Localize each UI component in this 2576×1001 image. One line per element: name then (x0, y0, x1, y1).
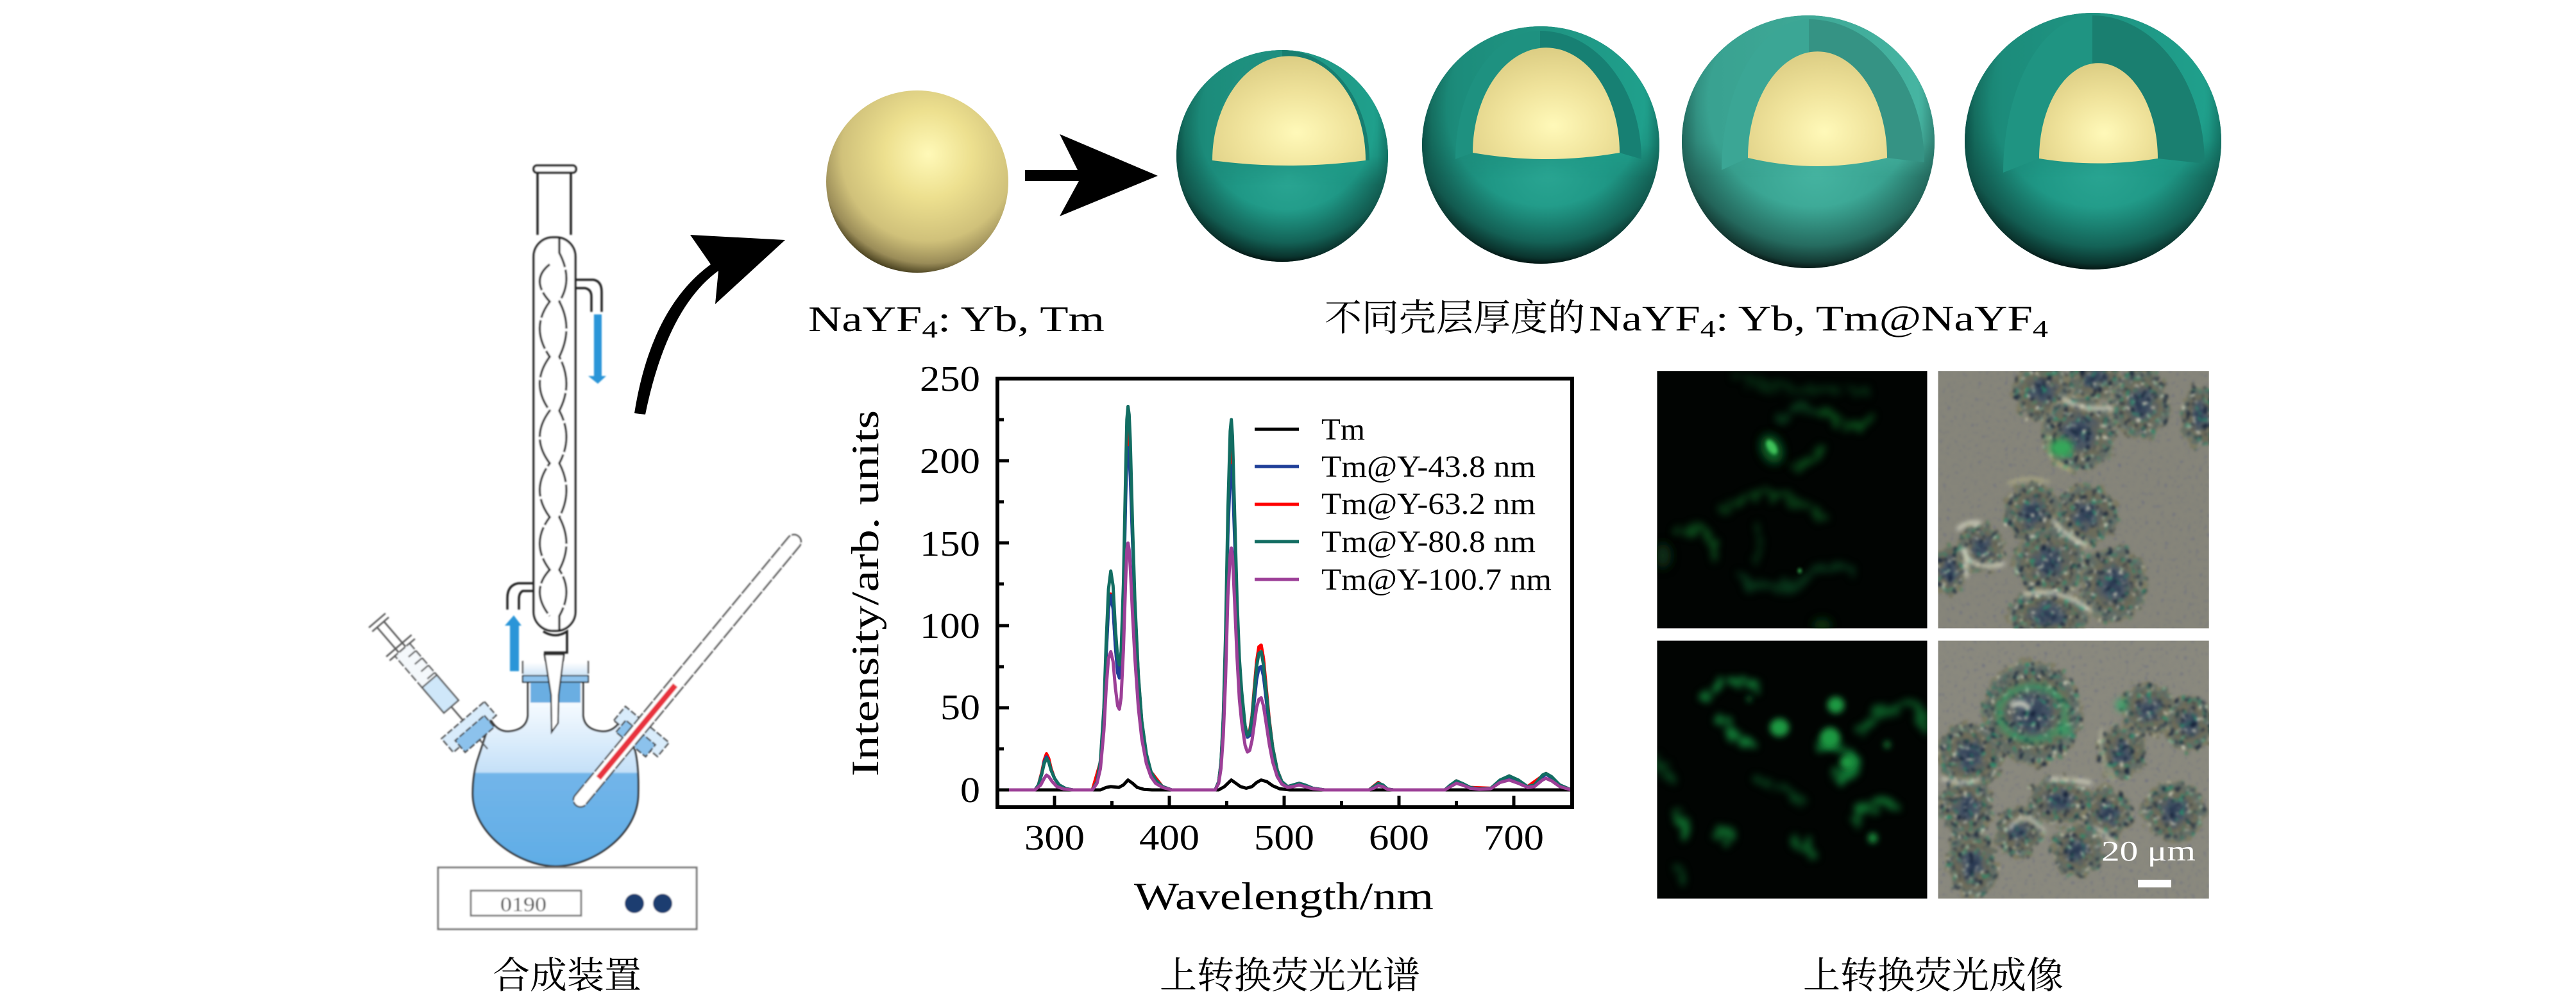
x-axis tick labels: 500 (1254, 818, 1314, 858)
blue water flow arrow: inlet (505, 615, 521, 671)
adapter tip (545, 654, 564, 732)
y-axis tick labels: 250 (920, 359, 980, 399)
y-axis title: Intensity/arb. units (844, 410, 886, 776)
straight arrow core to core-shell (1025, 134, 1158, 216)
legend: Tm@Y-100.7 nm (1321, 563, 1552, 597)
caption: upconversion spectrum: 上转换荧光光谱 (1160, 945, 1420, 999)
caption: core-shell materials: NaYF (1589, 299, 1677, 339)
x-axis tick labels: 700 (1484, 818, 1544, 858)
core-shell sphere 1 (1176, 50, 1388, 262)
y-axis tick labels (920, 359, 980, 810)
legend: Tm (1321, 413, 1365, 447)
microscopy image panels (1654, 355, 2217, 898)
caption: core material: NaYF (808, 300, 896, 339)
panel: fluorescence bottom (1657, 641, 1927, 898)
core-shell sphere 4 (1965, 13, 2221, 270)
y-axis tick labels: 50 (940, 688, 980, 728)
core-shell sphere 3 (1682, 15, 1935, 268)
y-axis tick labels: 100 (920, 606, 980, 646)
syringe (364, 610, 500, 760)
panel: fluorescence top (1654, 371, 1927, 631)
caption: upconversion imaging: 上转换荧光成像 (1803, 945, 2063, 999)
caption: core-shell materials: : Yb, Tm@NaYF (1716, 299, 2033, 339)
curved black arrow (634, 235, 785, 415)
stirrer hotplate: 0190 (500, 893, 547, 916)
caption: synthesis setup: 合成装置 (493, 945, 641, 999)
legend: Tm@Y-80.8 nm (1321, 525, 1536, 559)
x-axis tick labels (1024, 818, 1544, 858)
right septum clamp (609, 706, 669, 762)
left septum clamp (442, 702, 501, 758)
core-shell sphere 2 (1422, 26, 1659, 264)
caption: core-shell materials: 4 (1700, 316, 1716, 343)
panel: bright field top (1938, 371, 2209, 629)
legend: Tm@Y-43.8 nm (1321, 450, 1536, 484)
legend: Tm@Y-63.2 nm (1321, 487, 1536, 521)
reaction apparatus illustration (364, 166, 804, 929)
x-axis tick labels: 300 (1024, 818, 1085, 858)
scale bar (2138, 880, 2171, 887)
y-axis tick labels: 200 (920, 441, 980, 481)
stirrer hotplate (438, 868, 697, 929)
caption: core-shell materials: 4 (2033, 316, 2048, 343)
caption: core material: : Yb, Tm (938, 300, 1105, 339)
x-axis tick labels: 600 (1369, 818, 1429, 858)
y-axis tick labels: 150 (920, 524, 980, 564)
spectra curves (1008, 406, 1572, 790)
x-axis title: Wavelength/nm (1134, 875, 1434, 918)
legend (1255, 413, 1552, 597)
thermometer (571, 532, 804, 810)
scale label: 20 μm (2101, 835, 2196, 867)
blue water flow arrow: outlet (588, 314, 606, 384)
condenser column (507, 166, 602, 653)
core nanoparticle sphere (826, 90, 1008, 273)
three-neck flask (473, 661, 638, 866)
panel: bright field bottom (1938, 641, 2212, 898)
x-axis tick labels: 400 (1139, 818, 1199, 858)
spectrum chart (844, 359, 1572, 918)
caption: core material: 4 (922, 316, 938, 343)
caption: core-shell materials: 不同壳层厚度的 (1325, 287, 1585, 341)
y-axis tick labels: 0 (960, 771, 980, 810)
chart frame and ticks (997, 379, 1572, 807)
caption: core-shell materials (1325, 287, 2048, 343)
